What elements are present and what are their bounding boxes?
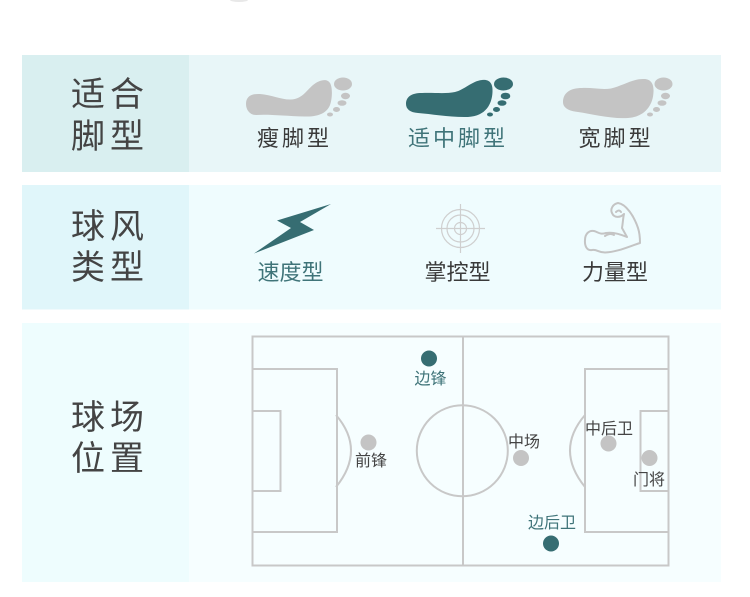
marker: centre back: 中后卫 xyxy=(585,420,633,438)
icon: flexed arm xyxy=(585,203,640,252)
heading: position xyxy=(71,399,149,478)
marker: striker: 前锋 xyxy=(355,452,387,470)
label: slim foot: 瘦脚型 xyxy=(257,126,332,151)
label: medium foot: 适中脚型 xyxy=(408,126,508,151)
marker: winger: 边锋 xyxy=(414,370,447,388)
marker: midfielder: 中场 xyxy=(508,433,540,451)
label: control: 掌控型 xyxy=(424,260,491,285)
heading: play style: 类型 xyxy=(71,249,149,287)
icon: medium foot xyxy=(406,78,513,117)
heading: foot type: 脚型 xyxy=(71,118,149,156)
icon: crosshair xyxy=(436,204,485,253)
panel: position xyxy=(22,323,721,582)
heading: play style xyxy=(71,208,149,287)
label: power: 力量型 xyxy=(582,260,648,285)
marker: midfielder xyxy=(508,433,540,466)
panel: play style xyxy=(22,185,721,310)
marker: winger xyxy=(414,350,447,388)
marker: goalkeeper xyxy=(633,450,665,489)
heading: foot type xyxy=(71,76,149,156)
heading: foot type: 适合 xyxy=(71,76,149,114)
marker: centre back xyxy=(585,420,633,452)
label: speed: 速度型 xyxy=(257,260,324,285)
icon: wide foot xyxy=(563,78,672,118)
icon: slim foot xyxy=(246,78,352,117)
heading: play style: 球风 xyxy=(71,208,149,246)
chart: pitch xyxy=(252,336,668,566)
heading: position: 位置 xyxy=(71,440,149,478)
icon: lightning xyxy=(254,204,331,254)
label: wide foot: 宽脚型 xyxy=(578,126,654,151)
marker: full back xyxy=(528,514,576,552)
heading: position: 球场 xyxy=(71,399,149,437)
marker: striker xyxy=(355,434,387,470)
marker: full back: 边后卫 xyxy=(528,514,576,532)
panel: foot type xyxy=(22,55,721,172)
marker: goalkeeper: 门将 xyxy=(633,471,665,489)
